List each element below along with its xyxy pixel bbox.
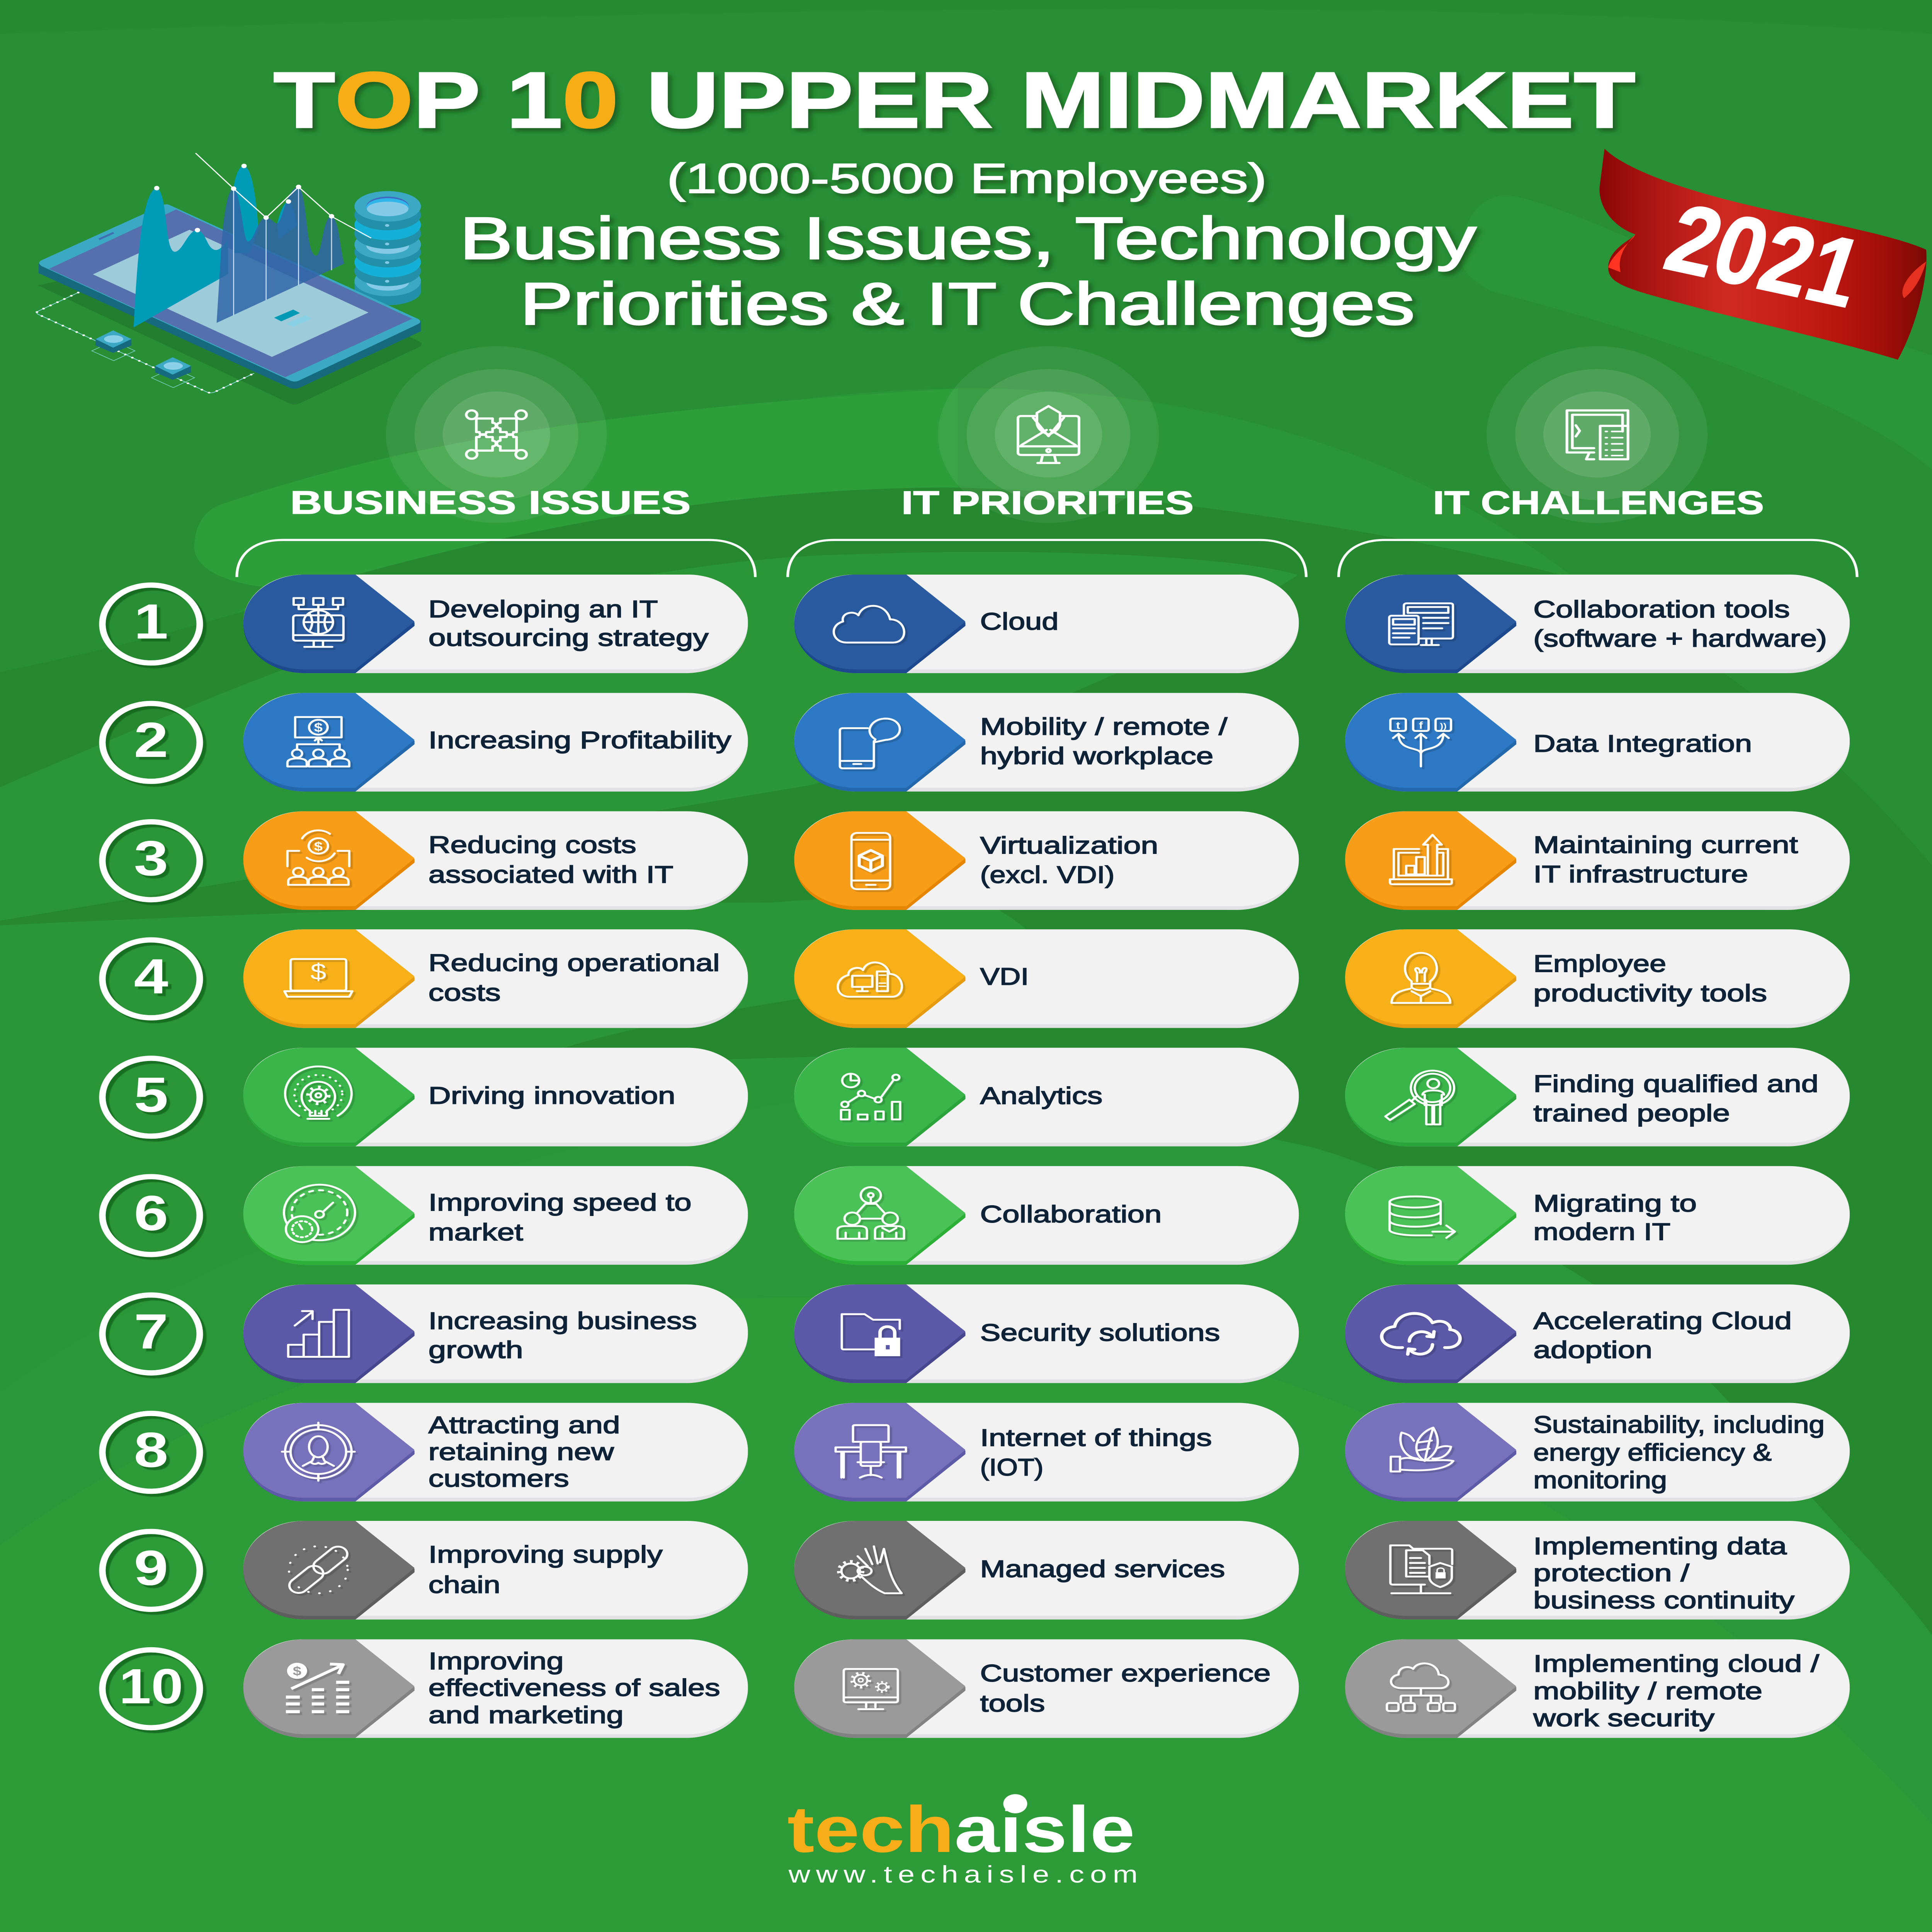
rank numbers 1 to 10: 3 <box>134 831 168 886</box>
label: energy efficiency & <box>1533 1439 1772 1466</box>
icon: puzzle <box>466 410 527 459</box>
label: Improving <box>429 1648 564 1674</box>
label <box>429 595 709 651</box>
label: modern IT <box>1533 1218 1670 1245</box>
icon: team with idea <box>838 1187 904 1239</box>
rank numbers 1 to 10: 1 <box>134 594 168 649</box>
icon: person with bulb head <box>1391 953 1450 1003</box>
label: Implementing cloud / <box>1533 1650 1819 1677</box>
label: Collaboration tools <box>1533 596 1790 622</box>
row 7: Accelerating Cloud adoption <box>1345 1284 1850 1383</box>
icon rings: business issues <box>386 346 607 523</box>
label: (IOT) <box>980 1454 1043 1481</box>
label <box>1533 1307 1792 1363</box>
row 2: Mobility / remote / hybrid workplace <box>794 693 1299 791</box>
label <box>429 1541 663 1598</box>
label: market <box>429 1218 523 1245</box>
icon: social data branches <box>1390 719 1451 767</box>
label: protection / <box>1533 1560 1690 1586</box>
row 4: Reducing operational costs <box>243 929 748 1028</box>
icon: gear bulb <box>285 1066 352 1119</box>
label <box>980 1424 1212 1481</box>
row 8: Sustainability, including energy efficiency & monitoring <box>1345 1403 1850 1502</box>
icon: monitor and server <box>1567 410 1628 459</box>
icon: laptop dollar <box>284 959 352 997</box>
icon: database arrow <box>1389 1196 1455 1238</box>
label: business continuity <box>1533 1587 1795 1614</box>
icon: magnifier person <box>1385 1071 1454 1124</box>
panel: IT challenges <box>1338 346 1857 1738</box>
icon: cloud and desktop <box>838 963 902 997</box>
rank numbers 1 to 10: 9 <box>134 1540 168 1595</box>
label <box>429 1307 697 1363</box>
row 9: Improving supply chain <box>243 1521 748 1619</box>
label: Data Integration <box>1533 730 1752 757</box>
panel: business issues <box>237 346 755 1738</box>
icon: globe monitor <box>293 598 344 647</box>
label: Cloud <box>980 608 1058 635</box>
icon: phone and speech bubble <box>840 719 900 768</box>
label: Reducing operational <box>429 949 720 976</box>
panel: IT priorities <box>788 346 1306 1738</box>
icon: cloud <box>834 606 904 643</box>
row 2: Data Integration <box>1345 693 1850 791</box>
label: Developing an IT <box>429 595 658 622</box>
label <box>1533 596 1827 652</box>
icon: social data branches: t <box>1396 720 1400 731</box>
label: (excl. VDI) <box>980 861 1114 888</box>
label: Attracting and <box>429 1411 620 1438</box>
label: Improving supply <box>429 1541 663 1568</box>
rank numbers 1 to 10: 2 <box>134 712 168 767</box>
label: Mobility / remote / <box>980 713 1228 740</box>
icon: chain link <box>286 1544 351 1596</box>
row 3: Maintaining current IT infrastructure <box>1345 811 1850 910</box>
icon: target person <box>282 1423 355 1481</box>
label: associated with IT <box>429 861 673 888</box>
label <box>429 1411 620 1492</box>
label: productivity tools <box>1533 980 1767 1007</box>
label: adoption <box>1533 1336 1652 1363</box>
bracket <box>237 540 755 577</box>
label <box>429 1189 692 1245</box>
row 7: Increasing business growth <box>243 1284 748 1383</box>
icon: laptop chart arrow <box>1390 835 1452 884</box>
label <box>980 832 1158 888</box>
heading: business issues: BUSINESS ISSUES <box>290 484 691 521</box>
rank numbers 1 to 10: 5 <box>134 1067 168 1122</box>
label: chain <box>429 1571 500 1598</box>
label: Implementing data <box>1533 1532 1787 1560</box>
label: Increasing Profitability <box>429 726 731 753</box>
label: IT infrastructure <box>1533 861 1748 888</box>
label: hybrid workplace <box>980 742 1213 769</box>
illustration: tablet with charts and database <box>37 153 422 405</box>
heading line 1: Business Issues, Technology <box>460 205 1476 271</box>
row 2: Increasing Profitability <box>243 693 748 791</box>
icon: monitor gears <box>844 1669 898 1709</box>
label <box>429 949 720 1006</box>
website url: www.techaisle.com <box>788 1861 1138 1888</box>
icon: coin and people <box>287 830 349 885</box>
label <box>429 1648 720 1728</box>
rank numbers 1 to 10: 4 <box>134 949 168 1004</box>
label: retaining new <box>429 1438 614 1465</box>
label <box>1533 831 1798 888</box>
label: Increasing business <box>429 1307 697 1334</box>
label: Driving innovation <box>429 1082 675 1109</box>
label <box>1533 1650 1819 1731</box>
label: costs <box>429 979 501 1006</box>
row 1: Developing an IT outsourcing strategy <box>243 575 748 673</box>
row 8: Internet of things (IOT) <box>794 1403 1299 1502</box>
bracket <box>788 540 1306 577</box>
label: Reducing costs <box>429 831 636 858</box>
label: trained people <box>1533 1099 1730 1126</box>
label <box>429 831 673 888</box>
row 6: Collaboration <box>794 1166 1299 1265</box>
label: Employee <box>1533 950 1666 977</box>
icon: cloud sync <box>1382 1313 1460 1354</box>
ribbon: 2021 <box>1600 149 1927 360</box>
label <box>1533 1532 1795 1614</box>
bracket <box>1338 540 1857 577</box>
icon: devices <box>1389 603 1453 645</box>
label <box>980 713 1228 769</box>
label: Managed services <box>980 1555 1225 1582</box>
icon: hand with leaves <box>1391 1428 1453 1471</box>
icon: coin and people: $ <box>314 839 323 853</box>
rank numbers 1 to 10: 8 <box>134 1422 168 1478</box>
icon: social data branches: )) <box>1440 722 1447 731</box>
label: Virtualization <box>980 832 1158 859</box>
logo: techaisle: techaisle <box>787 1793 1135 1866</box>
row 10: Improving effectiveness of sales and marketing <box>243 1639 748 1738</box>
heading: IT priorities: IT PRIORITIES <box>901 485 1194 521</box>
label: effectiveness of sales <box>429 1674 720 1701</box>
heading: IT challenges: IT CHALLENGES <box>1433 485 1764 521</box>
row 5: Driving innovation <box>243 1048 748 1146</box>
icon: growth bars <box>288 1310 349 1357</box>
label: Security solutions <box>980 1319 1220 1346</box>
label: growth <box>429 1336 523 1363</box>
icon: monitor envelope shield <box>1018 406 1079 463</box>
label: VDI <box>980 963 1029 990</box>
label: Improving speed to <box>429 1189 692 1216</box>
rank numbers 1 to 10 <box>102 585 200 1728</box>
rank numbers 1 to 10: 7 <box>134 1304 168 1359</box>
row 10: Customer experience tools <box>794 1639 1299 1738</box>
label: Sustainability, including <box>1533 1411 1825 1438</box>
row 10: Implementing cloud / mobility / remote work security <box>1345 1639 1850 1738</box>
label: Maintaining current <box>1533 831 1798 858</box>
row 6: Improving speed to market <box>243 1166 748 1265</box>
label <box>980 1660 1270 1717</box>
subtitle: (1000-5000 Employees) <box>667 155 1267 202</box>
icon: folder lock <box>842 1314 900 1356</box>
label: outsourcing strategy <box>429 624 709 651</box>
icon: phone with cube <box>852 833 890 889</box>
icon: dollar chart: $ <box>293 1664 301 1678</box>
row 9: Implementing data protection / business continuity <box>1345 1521 1850 1619</box>
icon: social data branches: f <box>1419 720 1423 731</box>
icon: desk and chair <box>836 1425 906 1478</box>
icon: money and people: $ <box>314 720 323 734</box>
label <box>1533 1190 1697 1245</box>
icon rings: IT priorities <box>938 346 1159 523</box>
row 5: Analytics <box>794 1048 1299 1146</box>
label: Customer experience <box>980 1660 1270 1687</box>
label: (software + hardware) <box>1533 625 1827 652</box>
icon: laptop dollar: $ <box>310 959 326 985</box>
label: Analytics <box>980 1082 1102 1109</box>
icon: folder document shield <box>1390 1545 1452 1593</box>
row 3: Reducing costs associated with IT <box>243 811 748 910</box>
label: work security <box>1533 1704 1715 1731</box>
label: Migrating to <box>1533 1190 1697 1217</box>
label <box>1533 1070 1818 1126</box>
row 4: VDI <box>794 929 1299 1028</box>
title: TOP 10 UPPER MIDMARKET <box>274 56 1635 145</box>
label <box>1533 950 1767 1007</box>
row 9: Managed services <box>794 1521 1299 1619</box>
icon: speedometers <box>284 1185 355 1242</box>
row 8: Attracting and retaining new customers <box>243 1403 748 1502</box>
icon: money and people <box>287 717 349 767</box>
label: customers <box>429 1465 569 1492</box>
heading line 2: Priorities & IT Challenges <box>520 270 1415 337</box>
label: Finding qualified and <box>1533 1070 1818 1097</box>
label: and marketing <box>429 1701 624 1728</box>
label: Accelerating Cloud <box>1533 1307 1792 1334</box>
icon: cloud network <box>1387 1663 1455 1711</box>
icon: hand with gear <box>839 1546 902 1593</box>
row 3: Virtualization (excl. VDI) <box>794 811 1299 910</box>
label: Internet of things <box>980 1424 1212 1451</box>
label: mobility / remote <box>1533 1677 1762 1704</box>
icon: dollar chart <box>286 1663 349 1712</box>
label: monitoring <box>1533 1466 1667 1493</box>
row 6: Migrating to modern IT <box>1345 1166 1850 1265</box>
row 5: Finding qualified and trained people <box>1345 1048 1850 1146</box>
row 7: Security solutions <box>794 1284 1299 1383</box>
row 4: Employee productivity tools <box>1345 929 1850 1028</box>
rank numbers 1 to 10: 10 <box>119 1658 183 1714</box>
row 1: Cloud <box>794 575 1299 673</box>
icon rings: IT challenges <box>1486 346 1708 523</box>
icon: analytics chart <box>841 1074 900 1119</box>
rank numbers 1 to 10: 6 <box>134 1185 168 1241</box>
row 1: Collaboration tools (software + hardware) <box>1345 575 1850 673</box>
label: Collaboration <box>980 1201 1162 1228</box>
label: tools <box>980 1690 1045 1717</box>
label <box>1533 1411 1825 1493</box>
